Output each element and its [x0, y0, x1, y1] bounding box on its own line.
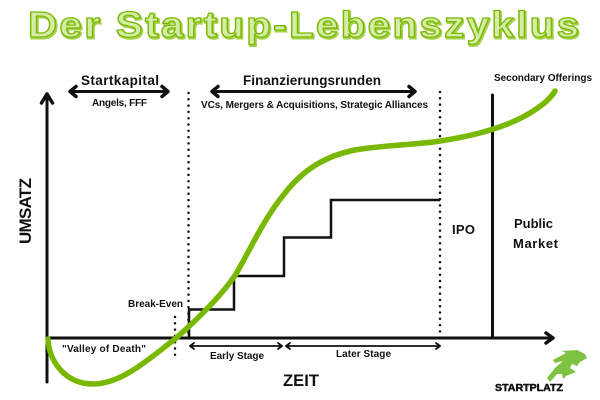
public market label: [513, 216, 559, 251]
dotted line: start of funding rounds: [187, 93, 190, 338]
public market label: Market: [513, 236, 559, 251]
finanzierungsrunden heading: Finanzierungsrunden: [243, 73, 381, 88]
startkapital sublabel: Angels, FFF: [92, 98, 147, 109]
funding staircase: [189, 200, 440, 338]
secondary offerings label: Secondary Offerings: [494, 73, 592, 84]
title: Der Startup-Lebenszyklus: [29, 6, 580, 47]
x axis label: ZEIT: [283, 372, 319, 390]
y axis arrow: [42, 94, 52, 382]
title: Der Startup-Lebenszyklus: [28, 5, 579, 45]
startkapital heading: Startkapital: [81, 73, 159, 88]
startkapital arrow: [70, 86, 168, 96]
icon: running figure: [547, 350, 587, 382]
dotted line: IPO: [439, 92, 441, 335]
lifecycle curve: [48, 91, 555, 384]
break-even label: Break-Even: [128, 299, 183, 310]
early stage arrow: [190, 343, 282, 349]
logo wordmark: STARTPLATZ: [495, 382, 564, 394]
finanzierungsrunden arrow: [212, 86, 415, 96]
finanzierung sublabel: VCs, Mergers & Acquisitions, Strategic Alliances: [201, 100, 428, 111]
valley of death label: "Valley of Death": [62, 344, 146, 355]
public market divider: [491, 95, 494, 338]
startplatz logo: [495, 350, 587, 394]
x axis arrow: [47, 333, 553, 343]
early stage label: Early Stage: [210, 351, 264, 362]
IPO label: IPO: [452, 222, 475, 237]
later stage label: Later Stage: [336, 349, 391, 360]
later stage arrow: [286, 343, 440, 349]
dotted line: break-even: [174, 317, 176, 360]
y axis label: UMSATZ: [16, 178, 35, 244]
public market label: Public: [514, 216, 553, 231]
